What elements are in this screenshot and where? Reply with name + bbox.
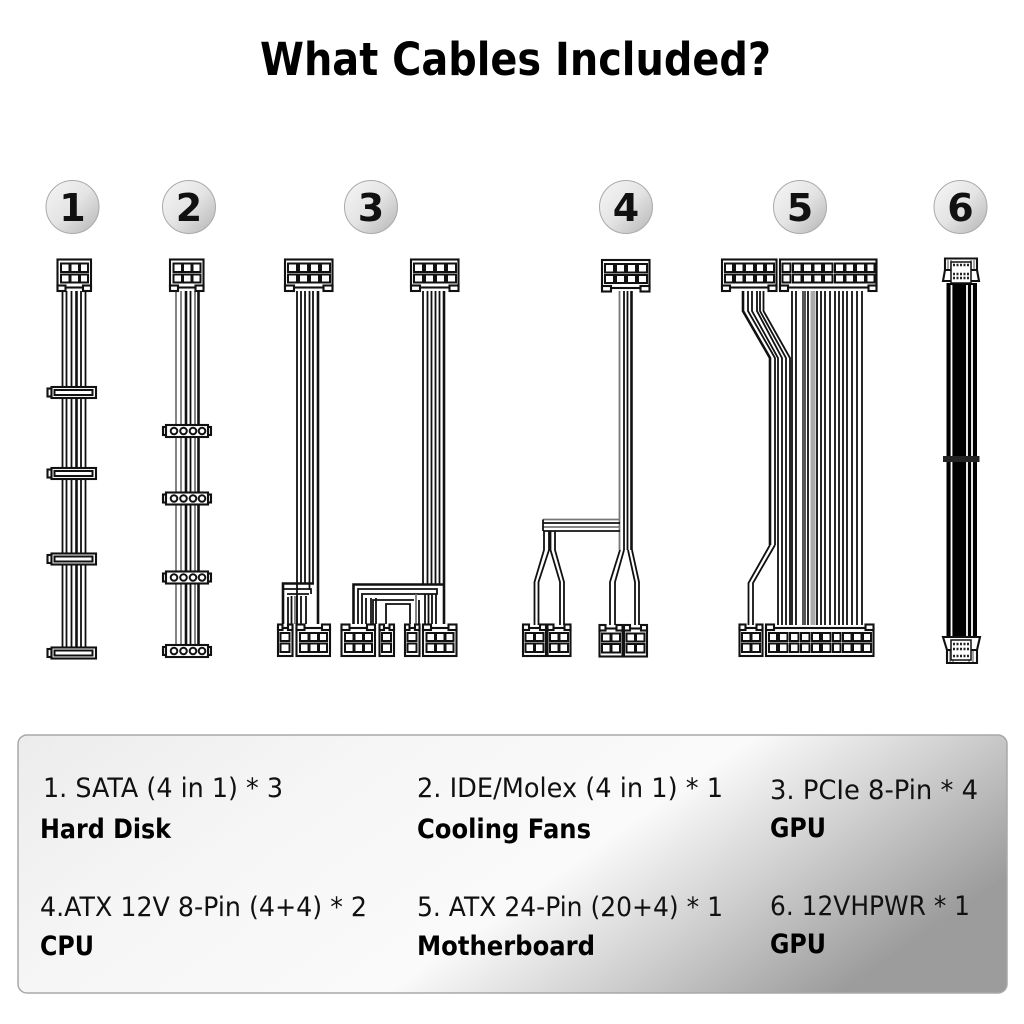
item 6: 12VHPWR: GPU bbox=[770, 929, 826, 960]
cable 5: ATX 24-pin bbox=[722, 260, 876, 656]
item 3: PCIe: GPU bbox=[770, 813, 826, 844]
badge 3: 3 bbox=[358, 186, 384, 230]
cable 4: ATX 12V bbox=[523, 260, 650, 656]
badge 2: 2 bbox=[176, 186, 202, 230]
item 2: IDE/Molex bbox=[417, 773, 723, 845]
item 4: ATX 12V bbox=[40, 892, 367, 962]
item 3: PCIe: 3. PCIe 8-Pin * 4 bbox=[770, 775, 978, 806]
badge 4: 4 bbox=[613, 186, 639, 230]
cable 3: PCIe bbox=[278, 260, 458, 656]
item 6: 12VHPWR: 6. 12VHPWR * 1 bbox=[770, 891, 970, 922]
item 5: ATX 24-pin: Motherboard bbox=[417, 931, 595, 962]
badge 2 bbox=[162, 180, 216, 234]
badge 1: 1 bbox=[59, 186, 86, 230]
item 1: SATA bbox=[40, 773, 283, 845]
item 5: ATX 24-pin bbox=[417, 892, 723, 962]
item 3: PCIe bbox=[770, 775, 978, 844]
cable 1: SATA bbox=[48, 260, 96, 658]
badge 6 bbox=[934, 180, 987, 234]
badge 1 bbox=[46, 180, 99, 234]
badge 5 bbox=[774, 180, 826, 234]
item 6: 12VHPWR bbox=[770, 891, 970, 960]
panel: cable list bbox=[18, 735, 1007, 993]
badge 4 bbox=[600, 180, 652, 234]
badge 6: 6 bbox=[947, 186, 974, 230]
item 4: ATX 12V: CPU bbox=[40, 931, 94, 962]
item 4: ATX 12V: 4.ATX 12V 8-Pin (4+4) * 2 bbox=[40, 892, 367, 923]
number badges bbox=[46, 180, 987, 234]
title: What Cables Included? bbox=[260, 33, 771, 86]
badge 3 bbox=[344, 180, 398, 234]
item 2: IDE/Molex: Cooling Fans bbox=[417, 814, 591, 845]
badge 5: 5 bbox=[787, 186, 813, 230]
item 2: IDE/Molex: 2. IDE/Molex (4 in 1) * 1 bbox=[417, 773, 723, 804]
item 1: SATA: 1. SATA (4 in 1) * 3 bbox=[43, 773, 283, 804]
item 1: SATA: Hard Disk bbox=[40, 814, 172, 845]
cable 6: 12VHPWR bbox=[943, 258, 980, 663]
cable 2: Molex bbox=[163, 260, 211, 657]
item 5: ATX 24-pin: 5. ATX 24-Pin (20+4) * 1 bbox=[417, 892, 723, 923]
